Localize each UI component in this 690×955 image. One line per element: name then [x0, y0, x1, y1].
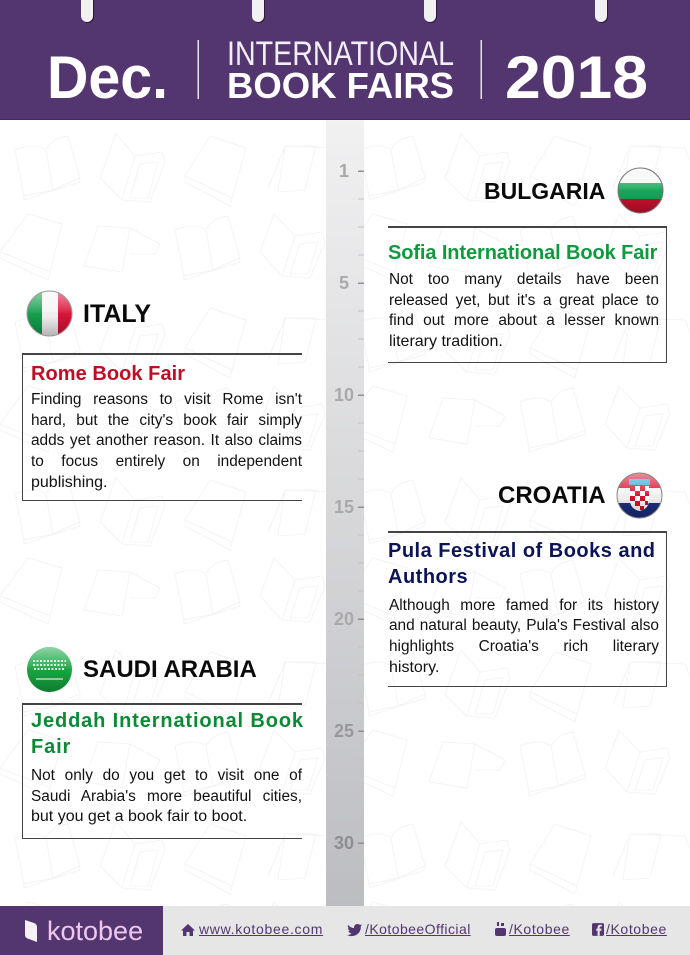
- header title text: Dec.: [47, 44, 168, 111]
- icon: Croatia flag: [616, 472, 662, 518]
- icon: youtube: [495, 922, 506, 936]
- panel: Saudi Arabia: Fair: [31, 736, 71, 758]
- description: adds yet another reason. It also claims: [31, 432, 302, 449]
- panel: Croatia: [388, 472, 667, 687]
- country name: BULGARIA: [484, 178, 605, 204]
- icon: Bulgaria flag: [618, 168, 664, 214]
- timeline: [326, 120, 364, 906]
- country name: ITALY: [83, 300, 151, 328]
- panel: Bulgaria: [388, 168, 667, 363]
- description: released yet, but it's a great place to: [389, 292, 659, 309]
- link: twitter: /KotobeeOfficial: [365, 921, 471, 937]
- text: 30: [334, 833, 354, 853]
- panel: Saudi Arabia: [22, 647, 304, 839]
- fair title: Jeddah International Book: [31, 710, 304, 732]
- country name: CROATIA: [498, 482, 606, 509]
- description: find out more about a lesser known: [389, 312, 659, 329]
- description: Saudi Arabia's more beautiful cities,: [31, 788, 302, 805]
- text: 25: [334, 721, 354, 741]
- icon: kotobee book: [25, 920, 37, 942]
- header title text: 2018: [505, 44, 648, 111]
- description: [389, 271, 659, 350]
- description: history.: [389, 659, 439, 676]
- card: [388, 531, 667, 687]
- footer links: [181, 922, 604, 936]
- fair title: Pula Festival of Books and: [388, 540, 656, 562]
- country name: SAUDI ARABIA: [83, 656, 257, 683]
- header title text: [47, 35, 648, 111]
- header band: [0, 0, 690, 120]
- description: [31, 767, 302, 825]
- description: Although more famed for its history: [389, 597, 659, 614]
- link: youtube: /Kotobee: [509, 921, 570, 937]
- card: [388, 226, 667, 363]
- icon: Saudi Arabia flag: [27, 647, 72, 692]
- panel: Croatia: Authors: [388, 566, 468, 588]
- card: [22, 353, 302, 501]
- text: 5: [339, 273, 349, 293]
- description: and natural beauty, Pula's Festival also: [389, 617, 659, 634]
- icon: twitter: [347, 924, 362, 936]
- description: literary tradition.: [389, 333, 503, 350]
- timeline day numbers: [334, 161, 354, 853]
- fair title: Sofia International Book Fair: [388, 242, 657, 264]
- text: 10: [334, 385, 354, 405]
- description: but you get a book fair to boot.: [31, 808, 247, 825]
- text: 1: [339, 161, 349, 181]
- header title text: INTERNATIONAL: [227, 35, 454, 73]
- binder rings: [81, 0, 608, 23]
- description: Not only do you get to visit one of: [31, 767, 302, 784]
- description: publishing.: [31, 474, 108, 491]
- description: Not too many details have been: [389, 271, 659, 288]
- icon: facebook: [592, 923, 604, 936]
- link: website: www.kotobee.com: [199, 921, 323, 937]
- fair title: Rome Book Fair: [31, 363, 185, 385]
- footer bar: [0, 906, 690, 955]
- text: 15: [334, 497, 354, 517]
- icon: Italy flag: [26, 290, 72, 336]
- description: highlights Croatia's rich literary: [389, 638, 659, 655]
- text: 20: [334, 609, 354, 629]
- description: [31, 391, 302, 491]
- description: Finding reasons to visit Rome isn't: [31, 391, 302, 408]
- footer brand: [0, 906, 163, 955]
- card: [22, 703, 302, 839]
- header title text: BOOK FAIRS: [227, 65, 454, 106]
- link: facebook: /Kotobee: [606, 921, 667, 937]
- description: hard, but the city's book fair simply: [31, 412, 302, 429]
- icon: home: [181, 924, 195, 936]
- description: to focus entirely on independent: [31, 453, 302, 470]
- description: [389, 597, 659, 676]
- brand name: kotobee: [47, 916, 143, 946]
- panel: Italy: [22, 290, 302, 501]
